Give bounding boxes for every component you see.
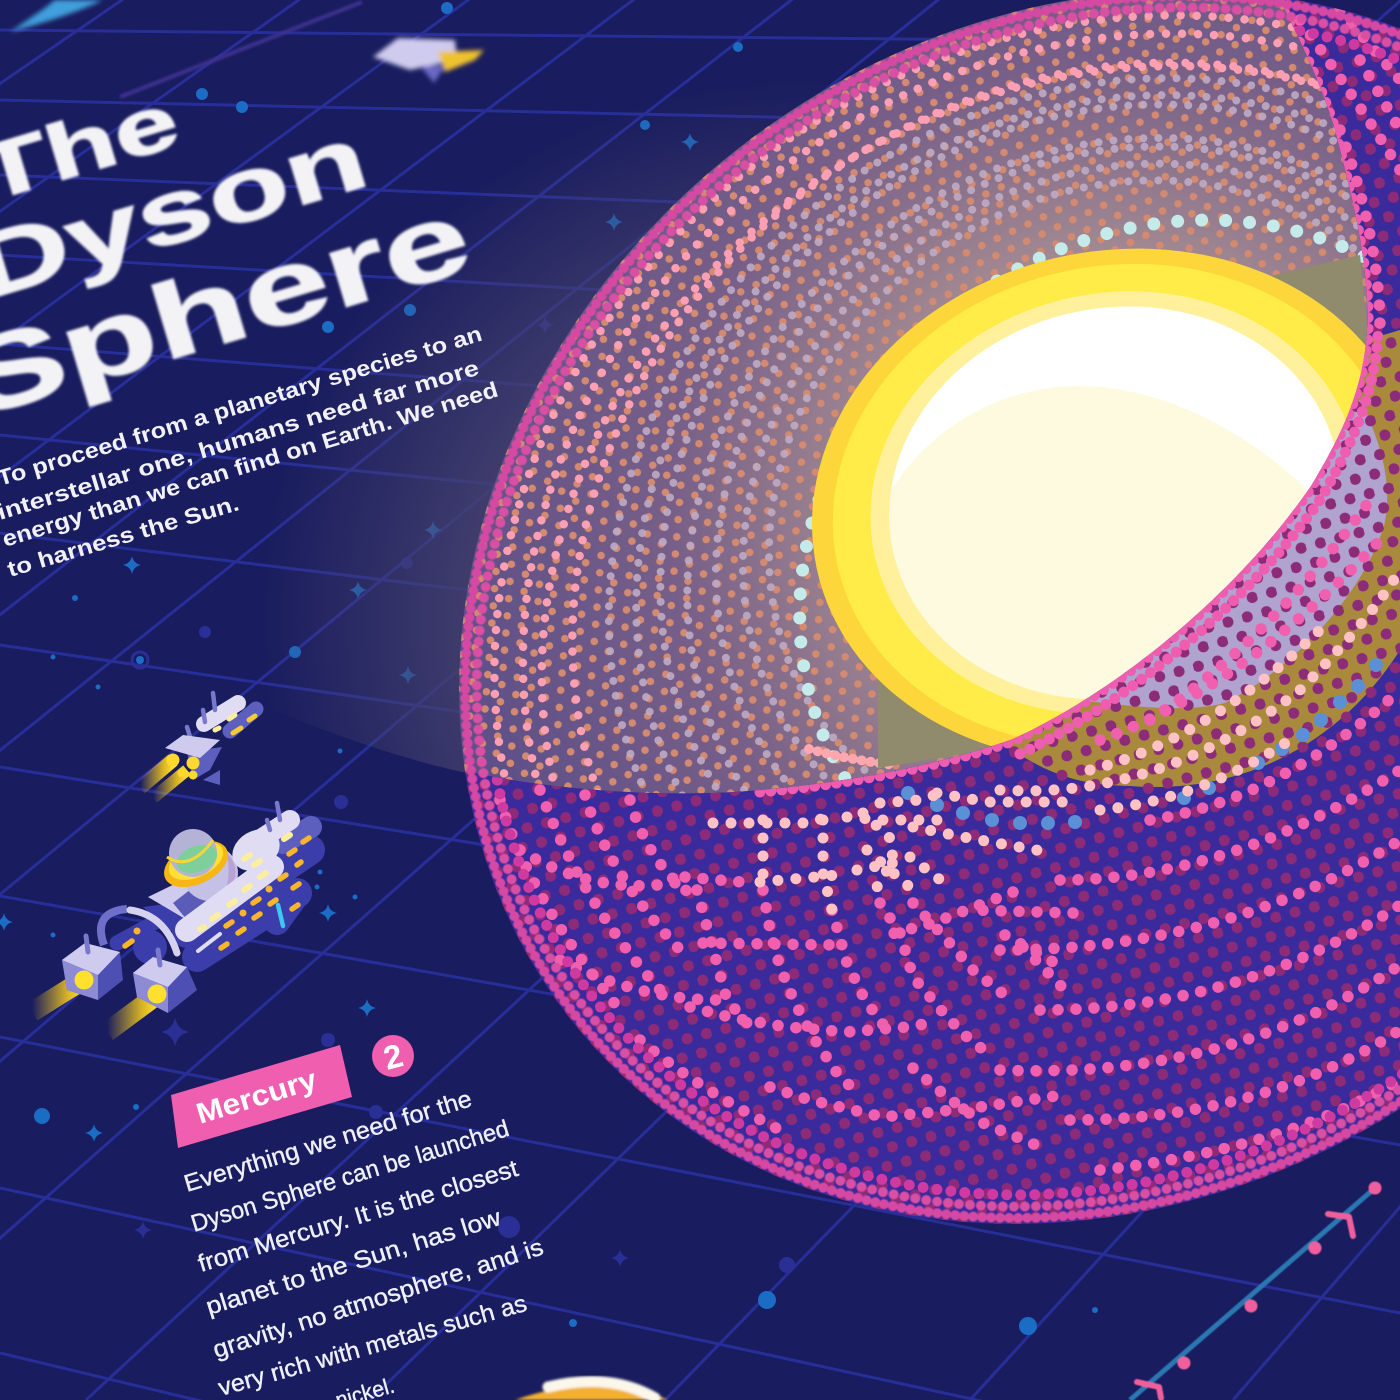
lower rim inner row [492, 25, 1400, 1200]
dome base [182, 845, 238, 901]
pale pink dot web [713, 570, 1400, 910]
sphere rim dots [460, 0, 1400, 1224]
flames [32, 980, 157, 1032]
dome glass [169, 829, 217, 877]
sun [812, 248, 1366, 746]
hull [187, 747, 222, 780]
dome green [173, 840, 221, 878]
top fins [267, 803, 280, 830]
mercury paragraph: gravity, no atmosphere, and is [210, 1234, 547, 1364]
haze glow around sphere [250, 0, 1100, 794]
background stars and dots [0, 2, 1098, 1335]
cut edge dots [760, 0, 1378, 792]
number badge: 2 [379, 1036, 407, 1077]
mercury paragraph: planet to the Sun, has low [203, 1204, 505, 1321]
flames [140, 760, 187, 798]
maroon dot field [465, 0, 1400, 1224]
aqua dot ring [793, 214, 1364, 780]
rear capsule [230, 709, 256, 731]
white trim [198, 934, 220, 951]
rear capsule [283, 827, 311, 843]
block dark face [143, 903, 187, 932]
engine fins [86, 936, 160, 965]
sun white core [889, 306, 1334, 699]
dyson sphere [459, 0, 1400, 1224]
nozzles [74, 970, 94, 990]
sun pale ring [870, 291, 1346, 712]
translucent upper shell [459, 0, 1368, 794]
mercury label [171, 1045, 352, 1148]
dome gold inner [163, 834, 229, 888]
engine block [165, 735, 220, 758]
amber lights [125, 838, 309, 948]
hull top capsule [250, 820, 290, 846]
upper body [204, 703, 238, 724]
intro paragraph [0, 321, 501, 582]
block face [173, 886, 210, 920]
inner arch [130, 910, 177, 953]
bottom planet [515, 1382, 668, 1400]
large spaceship [32, 803, 311, 1032]
hull dark mid [187, 850, 310, 933]
orbit nodes [1178, 1182, 1382, 1370]
dome halo [167, 840, 213, 862]
small spaceship [140, 693, 256, 798]
intro paragraph: to harness the Sun. [4, 490, 242, 582]
salmon edge dots [809, 749, 895, 765]
label tag [171, 1045, 352, 1148]
light pink dot chains [490, 11, 1320, 790]
label text: Mercury [193, 1064, 321, 1131]
salmon dot field [459, 0, 1367, 794]
intro paragraph: energy than we can find on Earth. We need [0, 377, 501, 552]
fins [187, 693, 215, 743]
lilac inner band [1080, 400, 1387, 708]
connector [117, 903, 190, 943]
blue dots [901, 658, 1383, 830]
top purple orbit line [120, 2, 362, 97]
bright pink dot web [500, 10, 1400, 1170]
pale window lights [200, 835, 290, 929]
sun cream core [889, 386, 1308, 699]
mercury paragraph: Dyson Sphere can be launched [188, 1115, 512, 1238]
gold inner band [990, 330, 1400, 787]
tail fin [203, 770, 220, 785]
nozzle dots [166, 754, 200, 780]
shell tint [459, 0, 1368, 794]
hull blob [225, 821, 287, 879]
left engine [62, 943, 123, 1000]
mercury paragraph: very rich with metals such as [215, 1290, 530, 1400]
amber dots [134, 886, 272, 934]
cyan bar [278, 905, 283, 926]
top distant ship [373, 38, 484, 83]
sun ring [832, 264, 1361, 736]
dome shading [224, 852, 236, 896]
shell base [465, 0, 1400, 1224]
tail knob [277, 897, 295, 922]
core joint [133, 930, 167, 964]
orbit arrow line [1130, 1182, 1382, 1400]
mercury paragraph: from Mercury. It is the closest [195, 1155, 522, 1278]
block top [148, 878, 220, 920]
dome gold ring [157, 832, 235, 896]
intro paragraph: interstellar one, humans need far more [0, 355, 482, 525]
mercury paragraph [181, 1085, 547, 1400]
arrowheads [1137, 1214, 1353, 1398]
sun outer ring [812, 248, 1366, 746]
opaque lower shell [465, 0, 1400, 1224]
olive interior right [1271, 255, 1367, 346]
right engine [133, 957, 197, 1013]
number badge [372, 1035, 414, 1077]
mauve dot chains [604, 74, 1358, 794]
top left blue fragment [10, 0, 103, 32]
window lights [215, 715, 235, 730]
hull dark lower [197, 893, 297, 957]
outer arch [101, 909, 127, 945]
hull white [187, 867, 272, 930]
amber lights [233, 716, 255, 733]
olive interior left [878, 680, 992, 768]
intro paragraph: To proceed from a planetary species to an [0, 321, 485, 491]
orbit path [1130, 1188, 1375, 1400]
title [0, 76, 483, 439]
mercury paragraph: Everything we need for the [181, 1085, 475, 1198]
